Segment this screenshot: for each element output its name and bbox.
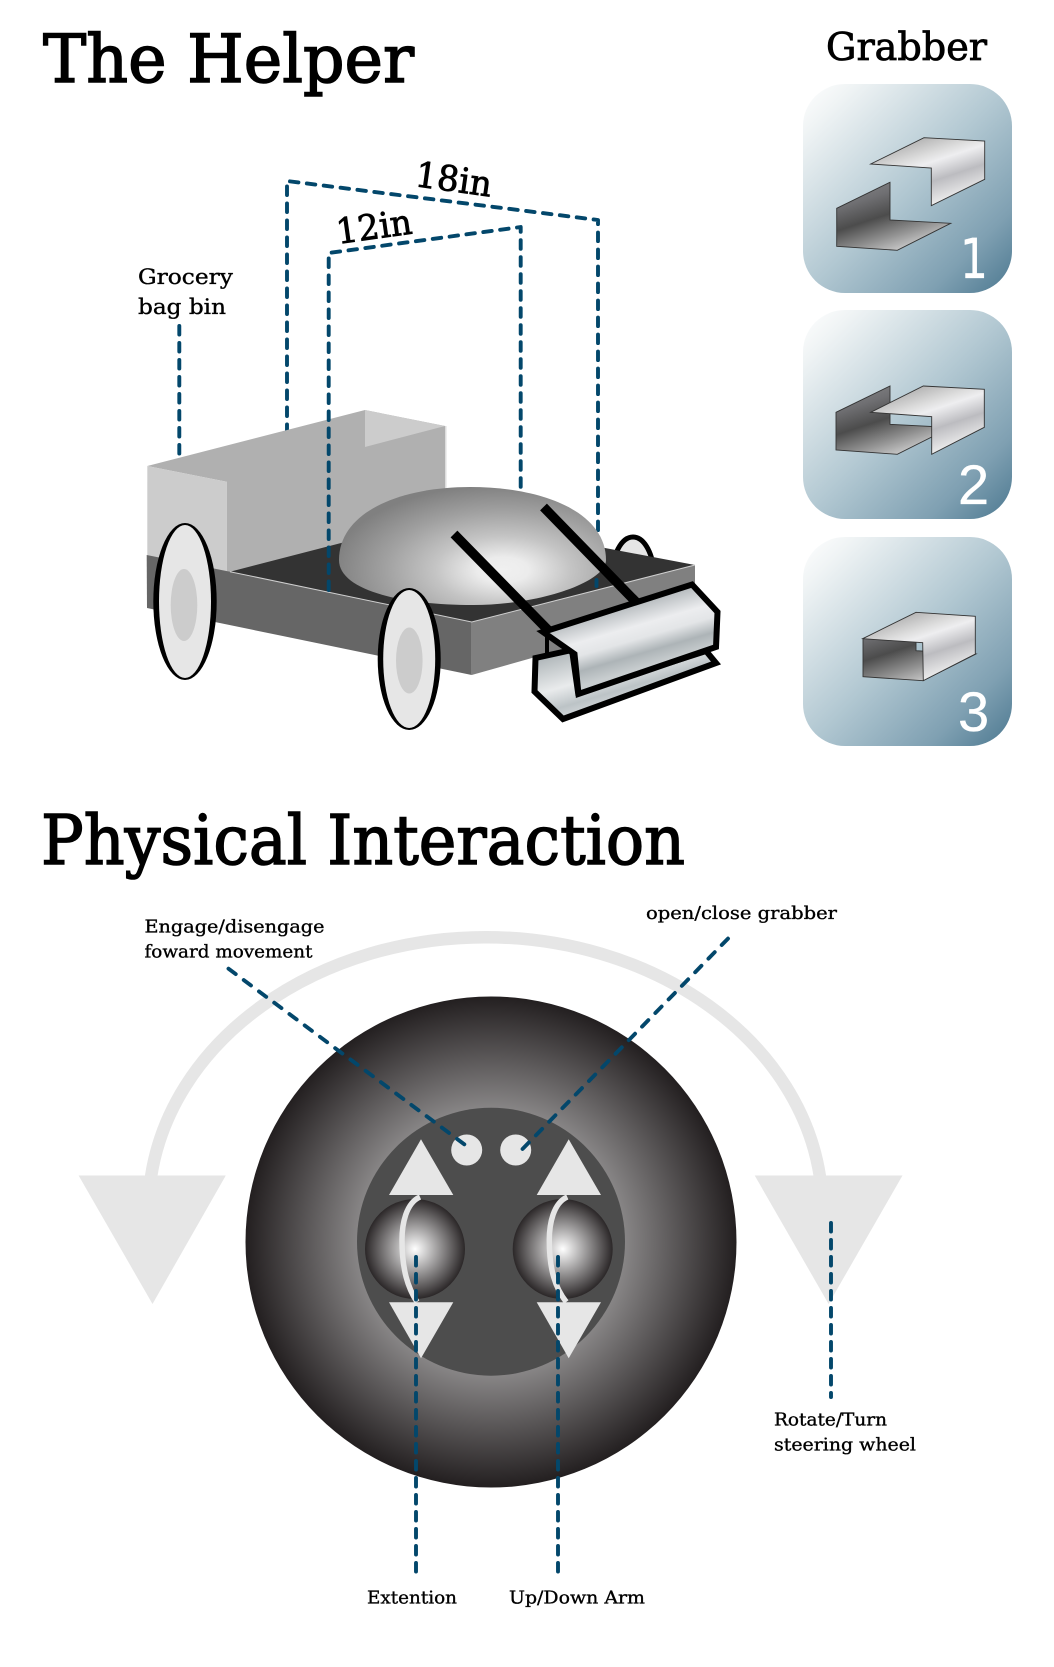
arrow: rotate steering wheel xyxy=(79,937,903,1304)
label: Grocery bag bin xyxy=(138,265,233,319)
label: Rotate/Turn steering wheel: steering wheel xyxy=(774,1434,916,1456)
panel: grabber step 1 xyxy=(803,84,1012,293)
icon: grabber jaws closing xyxy=(836,386,984,454)
label: Up/Down Arm: Up/Down Arm xyxy=(509,1588,645,1608)
label: Rotate/Turn steering wheel: Rotate/Turn xyxy=(774,1410,887,1430)
label: Rotate/Turn steering wheel xyxy=(774,1410,916,1456)
number 1: 1 xyxy=(960,227,988,291)
panel: grabber step 2 xyxy=(803,310,1012,519)
grabber on cart xyxy=(534,584,718,719)
control: right joystick xyxy=(513,1139,613,1358)
icon: grabber closed xyxy=(863,612,976,681)
dashed line fragment behind dome xyxy=(595,580,598,586)
label: open/close grabber: open/close grabber xyxy=(646,903,837,924)
dashed line: 18in dimension xyxy=(287,181,598,533)
chassis xyxy=(147,542,695,675)
label: Engage/disengage forward movement: foward movement xyxy=(144,941,313,962)
icon: grabber jaws apart xyxy=(837,138,985,250)
far wheel xyxy=(612,537,654,617)
label: Grocery bag bin: bag bin xyxy=(138,295,226,319)
rear wheel xyxy=(153,523,217,680)
wheel hub xyxy=(357,1108,625,1376)
dome xyxy=(339,487,606,605)
steering wheel xyxy=(246,996,736,1488)
front wheel xyxy=(378,588,441,730)
dashed line: grocery bin leader xyxy=(177,326,181,460)
dashed line: 12in dimension xyxy=(329,227,521,590)
label: Engage/disengage forward movement: Engage/disengage xyxy=(144,917,324,938)
number 2: 2 xyxy=(958,453,989,516)
control: left joystick xyxy=(365,1139,465,1358)
label: 18in: 18in xyxy=(413,155,495,206)
panel: grabber step 3 xyxy=(803,537,1012,746)
label: 12in: 12in xyxy=(334,203,415,253)
number 3: 3 xyxy=(958,680,989,743)
label: Engage/disengage forward movement xyxy=(144,917,324,962)
dashed lines: control leaders xyxy=(228,939,831,1576)
button: grabber xyxy=(500,1134,531,1166)
button: engage xyxy=(451,1134,482,1166)
arms xyxy=(454,507,636,654)
heading: Grabber: Grabber xyxy=(826,25,988,69)
label: Extention: Extention xyxy=(367,1588,457,1608)
title: The Helper: The Helper xyxy=(43,21,414,98)
illustration: helper cart xyxy=(147,227,717,730)
grocery bag bin xyxy=(147,410,447,575)
title: Physical Interaction: Physical Interaction xyxy=(41,802,685,881)
label: Grocery bag bin: Grocery xyxy=(138,265,233,289)
